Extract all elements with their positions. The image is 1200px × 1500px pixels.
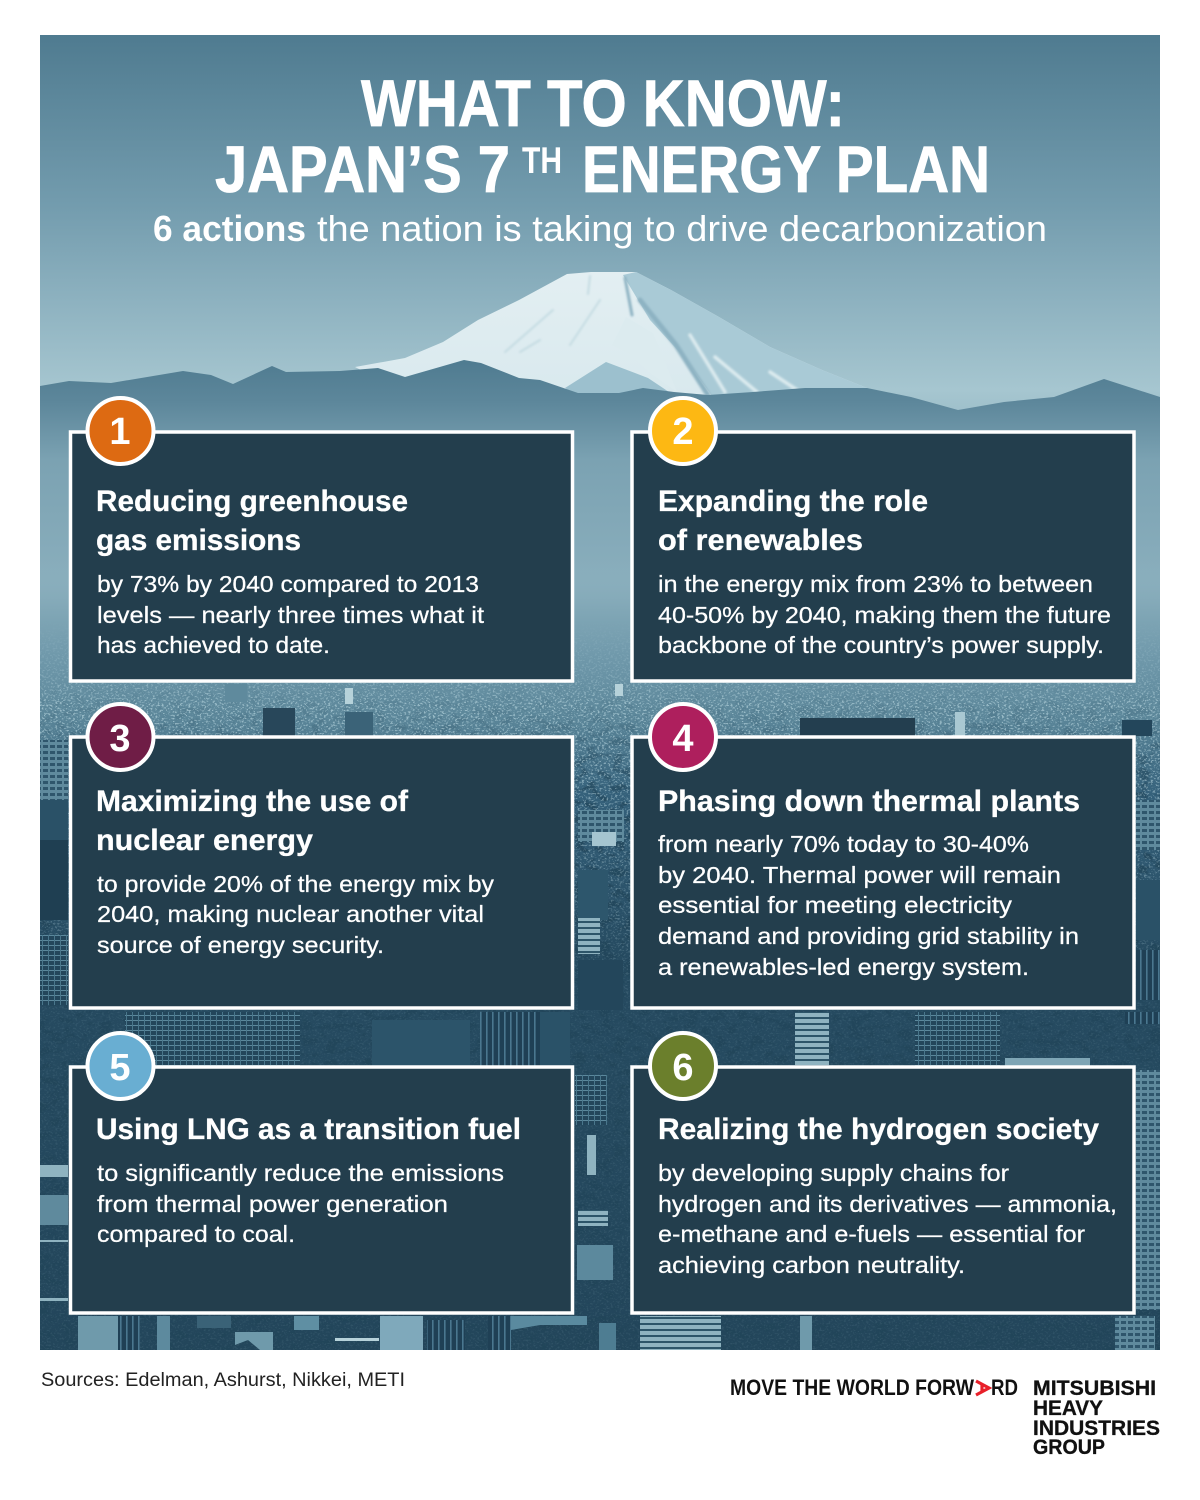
subtitle: the nation is taking to drive decarbonization	[317, 208, 1047, 249]
heading 5: Using LNG as a transition fuel	[96, 1113, 521, 1146]
body 4: a renewables-led energy system.	[658, 954, 1029, 980]
body 4: essential for meeting electricity	[658, 892, 1012, 918]
logo: Mitsubishi Heavy Industries Group: HEAVY	[1033, 1397, 1103, 1420]
body 6: achieving carbon neutrality.	[658, 1252, 965, 1278]
heading 1: Reducing greenhouse	[96, 485, 408, 518]
body 6: by developing supply chains for	[658, 1160, 1009, 1186]
body 4: from nearly 70% today to 30-40%	[658, 831, 1029, 857]
logo: Mitsubishi Heavy Industries Group	[1033, 1377, 1160, 1459]
body 1: has achieved to date.	[97, 632, 330, 658]
body 1	[97, 571, 485, 658]
title: JAPAN’S 7	[215, 132, 510, 206]
panel 1: reducing greenhouse gas emissions	[70, 398, 572, 681]
city skyline base	[40, 560, 1160, 1350]
body 5	[97, 1160, 504, 1247]
logo: Mitsubishi Heavy Industries Group: INDUSTRIES	[1033, 1417, 1160, 1440]
badge 1	[88, 398, 154, 464]
panel 3: maximizing nuclear energy	[70, 704, 572, 1008]
body 2	[658, 571, 1111, 658]
badge 5	[88, 1033, 154, 1099]
subtitle: 6 actions	[153, 208, 306, 249]
body 4: demand and providing grid stability in	[658, 923, 1079, 949]
heading 2: Expanding the role	[658, 485, 928, 518]
buildings, bottom strip	[78, 1316, 1155, 1350]
badge 3: 3	[109, 718, 131, 760]
heading 2	[658, 485, 928, 557]
body 3: 2040, making nuclear another vital	[97, 901, 484, 927]
logo: Mitsubishi Heavy Industries Group: GROUP	[1033, 1436, 1105, 1459]
heading 3	[96, 785, 409, 857]
icon: red arrow A	[976, 1381, 989, 1395]
body 4	[658, 831, 1079, 980]
panel 6: realizing the hydrogen society	[632, 1033, 1134, 1313]
body 2: 40-50% by 2040, making them the future	[658, 602, 1111, 628]
body 3	[97, 871, 494, 958]
body 3: source of energy security.	[97, 932, 384, 958]
logo: Mitsubishi Heavy Industries Group: MITSUBISHI	[1033, 1377, 1156, 1400]
slogan: move the world forward: RD	[991, 1375, 1018, 1400]
panel 2: expanding the role of renewables	[632, 398, 1134, 681]
panel 5: LNG as transition fuel	[70, 1033, 572, 1313]
body 1: levels — nearly three times what it	[97, 602, 485, 628]
foreground mountain ridge	[40, 360, 1160, 610]
title: ENERGY PLAN	[582, 132, 990, 206]
body 3: to provide 20% of the energy mix by	[97, 871, 494, 897]
body 2: in the energy mix from 23% to between	[658, 571, 1093, 597]
buildings, row 2 gap	[40, 684, 1160, 1010]
panel 4: phasing down thermal plants	[632, 704, 1134, 1008]
body 4: by 2040. Thermal power will remain	[658, 862, 1061, 888]
heading 3: Maximizing the use of	[96, 785, 409, 818]
body 6: hydrogen and its derivatives — ammonia,	[658, 1191, 1117, 1217]
slogan: move the world forward: MOVE THE WORLD FORW	[730, 1375, 974, 1400]
body 5: from thermal power generation	[97, 1191, 448, 1217]
badge 3	[88, 704, 154, 770]
body 5: to significantly reduce the emissions	[97, 1160, 504, 1186]
badge 4: 4	[672, 718, 694, 760]
title	[215, 66, 990, 206]
heading 4: Phasing down thermal plants	[658, 785, 1080, 818]
sources: Sources: Edelman, Ashurst, Nikkei, METI	[41, 1370, 405, 1391]
heading 1	[96, 485, 408, 557]
badge 2	[650, 398, 716, 464]
title: TH	[522, 140, 562, 181]
sky	[40, 35, 1160, 605]
badge 6: 6	[672, 1047, 694, 1089]
badge 6	[650, 1033, 716, 1099]
badge 1: 1	[109, 411, 131, 453]
heading 2: of renewables	[658, 524, 863, 557]
badge 2: 2	[672, 411, 694, 453]
buildings, row 3 gap	[40, 1012, 1160, 1310]
heading 1: gas emissions	[96, 524, 301, 557]
title: WHAT TO KNOW:	[361, 66, 845, 140]
badge 5: 5	[109, 1047, 131, 1089]
body 2: backbone of the country’s power supply.	[658, 632, 1104, 658]
body 6: e-methane and e-fuels — essential for	[658, 1221, 1085, 1247]
body 1: by 73% by 2040 compared to 2013	[97, 571, 479, 597]
city texture	[40, 590, 1160, 1350]
heading 6: Realizing the hydrogen society	[658, 1113, 1099, 1146]
mount fuji	[355, 272, 867, 400]
body 6	[658, 1160, 1117, 1278]
body 5: compared to coal.	[97, 1221, 295, 1247]
badge 4	[650, 704, 716, 770]
heading 3: nuclear energy	[96, 824, 313, 857]
